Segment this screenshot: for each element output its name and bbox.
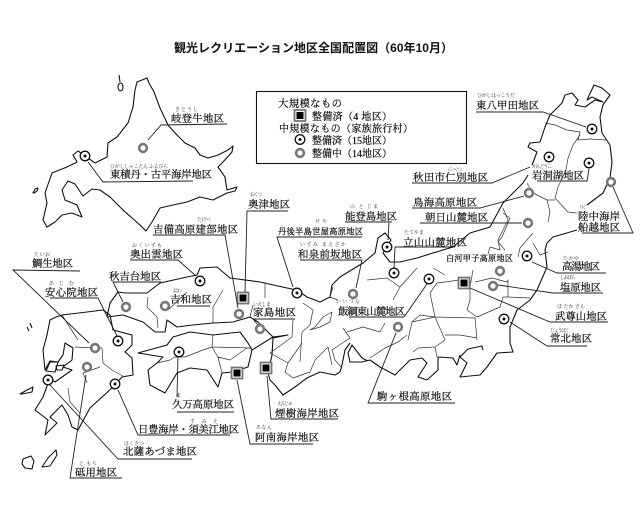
label: 鯛生地区 (13, 252, 99, 352)
label: 陸中海岸船越地区: りく (579, 204, 587, 211)
label: 能登島地区 (345, 204, 397, 252)
legend item: medium developed: 整備済（15地区） (312, 134, 392, 147)
label: 吉和地区: 吉和地区 (170, 293, 212, 306)
label: 日豊海岸・須美江地区: す み え (190, 419, 218, 425)
label: 常北地区: じょうほく (550, 327, 570, 334)
label: 陸中海岸船越地区: 船越地区 (578, 221, 620, 234)
label: 吉和地区: よしわ (172, 287, 182, 294)
label: 東積丹・古平海岸地区: 東積丹・古平海岸地区 (110, 168, 212, 181)
label: 東積丹・古平海岸地区 (80, 151, 212, 182)
label: 久万高原地区: 久万高原地区 (172, 398, 234, 411)
legend heading: large scale: 大規模なもの (278, 97, 342, 110)
label: 阿南海岸地区: あなん (256, 424, 272, 431)
label: 丹後半島世屋高原地区 (277, 219, 363, 298)
Honshu outline (107, 85, 612, 395)
label: 秋吉台地区 (109, 270, 161, 311)
label: 和泉前坂地区: いずみ まえさか (300, 241, 346, 248)
label: 日豊海岸・須美江地区: 日豊海岸・須美江地区 (138, 423, 239, 436)
label: 鯛生地区: 鯛生地区 (32, 257, 73, 270)
label: 丹後半島世屋高原地区: せや (315, 219, 327, 225)
label: 北薩あづま地区 (43, 375, 197, 459)
label: 久万高原地区 (172, 347, 234, 412)
label: 鯛生地区: たいお (34, 252, 50, 258)
label: 武尊山地区: ほ たか さん (557, 303, 585, 310)
label: 煙樹海岸地区 (260, 362, 339, 420)
legend box (256, 92, 466, 164)
label: 塩原地区: しおばら (560, 274, 576, 281)
label: 立山山麓地区: たてやま (404, 230, 424, 236)
label: 家島地区: 家島地区 (253, 306, 296, 319)
label: 奥津地区: 奥津地区 (248, 198, 290, 211)
label: 和泉前坂地区 (298, 241, 362, 298)
label: 陸中海岸船越地区: 陸中海岸 (578, 210, 620, 223)
label: 常北地区: 常北地区 (550, 332, 592, 345)
label: 武尊山地区 (458, 278, 608, 323)
label: 和泉前坂地区: 和泉前坂地区 (298, 248, 362, 261)
Kyushu and southern islands (20, 323, 64, 469)
label: 岐登牛地区: きとうし (175, 106, 198, 113)
label: 家島地区 (253, 301, 296, 333)
label: 砥用地区: と もち (79, 461, 97, 467)
label: 陸中海岸船越地区 (578, 178, 633, 234)
Kyushu outline (35, 310, 133, 435)
label: 鳥海高原地区: 鳥海高原地区 (413, 196, 477, 209)
label: 能登島地区: 能登島地区 (345, 210, 397, 223)
label: 吉備高原建部地区: 吉備高原建部地区 (153, 223, 238, 236)
legend item: large developed (294, 110, 392, 123)
label: 東積丹・古平海岸地区: ひがししゃこたん ふるびら (110, 163, 168, 170)
label: 東八甲田地区 (476, 92, 597, 134)
label: 阿南海岸地区: 阿南海岸地区 (255, 431, 319, 444)
label: 岐登牛地区: 岐登牛地区 (171, 112, 224, 125)
Hokkaido outline (43, 78, 237, 231)
legend item: medium in progress: 整備中（14地区） (312, 147, 392, 160)
label: 煙樹海岸地区: えんじゅ (277, 401, 293, 407)
label: 飯綱東山麓地区 (336, 274, 434, 318)
label: 白河甲子高原地区 (446, 251, 532, 263)
label: 砥用地区 (70, 363, 122, 479)
label: 吉和地区 (161, 287, 212, 310)
label: 白河甲子高原地区: 白河甲子高原地区 (446, 253, 513, 263)
label: 日豊海岸・須美江地区 (110, 379, 239, 436)
label: 秋田市仁別地区 (412, 152, 554, 184)
label: 飯綱東山麓地区: 飯綱東山麓地区 (338, 305, 405, 318)
label: 煙樹海岸地区: 煙樹海岸地区 (275, 407, 339, 420)
Shikoku outline (138, 332, 273, 393)
label: 駒ヶ根高原地区: 駒ヶ根高原地区 (376, 390, 452, 403)
label: 朝日山麓地区: 朝日山麓地区 (425, 211, 488, 224)
label: 飯綱東山麓地区: いいづな (336, 298, 360, 305)
label: 岐登牛地区 (139, 106, 227, 152)
label: 駒ヶ根高原地区 (368, 323, 455, 403)
label: 久万高原地区: く ま (176, 393, 181, 399)
label: 立山山麓地区: 立山山麓地区 (403, 236, 467, 249)
label: 秋吉台地区: 秋吉台地区 (109, 270, 161, 283)
label: 奥出雲地区: おくいずも (132, 242, 162, 249)
label: 高湯地区: 高湯地区 (562, 260, 600, 273)
label: 朝日山麓地区 (420, 211, 532, 227)
label: 家島地区: いえしま (253, 301, 271, 308)
label: 東八甲田地区: 東八甲田地区 (476, 99, 539, 112)
label: 吉備高原建部地区: たけべ (197, 217, 211, 223)
label: 高湯地区 (496, 255, 606, 275)
label: 常北地区 (499, 314, 592, 346)
label: 奥出雲地区 (130, 242, 205, 286)
label: 奥津地区 (238, 192, 290, 304)
label: 東八甲田地区: ひがしはっこうだ (477, 92, 515, 99)
label: 塩原地区: 塩原地区 (560, 281, 601, 294)
label: 秋田市仁別地区: にべつ (448, 167, 462, 173)
legend item: medium developed (295, 134, 392, 147)
label: 奥出雲地区: 奥出雲地区 (130, 248, 183, 261)
label: 岩洞湖地区: 岩洞湖地区 (532, 169, 584, 182)
label: 安心院地区: 安心院地区 (45, 286, 98, 299)
label: 岩洞湖地区: がんどうこ (532, 163, 552, 170)
label: 吉備高原建部地区 (153, 217, 243, 318)
map of Japan (13, 75, 633, 479)
label: 鳥海高原地区 (412, 189, 533, 209)
legend heading: medium scale: 中規模なもの（家族旅行村） (279, 122, 413, 135)
label: 安心院地区: あじむ (49, 281, 74, 287)
label: 北薩あづま地区: ほくさつ (124, 441, 144, 447)
label: 砥用地区: 砥用地区 (75, 466, 117, 479)
label: 能登島地区: の と じま (350, 204, 378, 210)
label: 塩原地区 (489, 274, 603, 294)
label: 立山山麓地区 (389, 230, 467, 278)
label: 岩洞湖地区 (532, 158, 594, 182)
label: 高湯地区: たかゆ (563, 255, 579, 262)
label: 阿南海岸地区 (232, 368, 319, 444)
title: 観光レクリエーション地区全国配置図（60年10月） (174, 40, 453, 55)
label: 安心院地区 (45, 281, 123, 346)
label: 武尊山地区: 武尊山地区 (555, 310, 607, 323)
label: 丹後半島世屋高原地区: 丹後半島世屋高原地区 (278, 226, 363, 236)
legend item: large developed: 整備済（4 地区） (312, 110, 392, 123)
label: 秋田市仁別地区: 秋田市仁別地区 (413, 171, 488, 184)
prefectural boundaries (62, 123, 607, 413)
northern and Hokkaido islands (33, 75, 123, 193)
label: 北薩あづま地区: 北薩あづま地区 (123, 445, 197, 458)
label: 奥津地区: おくつ (250, 192, 262, 198)
